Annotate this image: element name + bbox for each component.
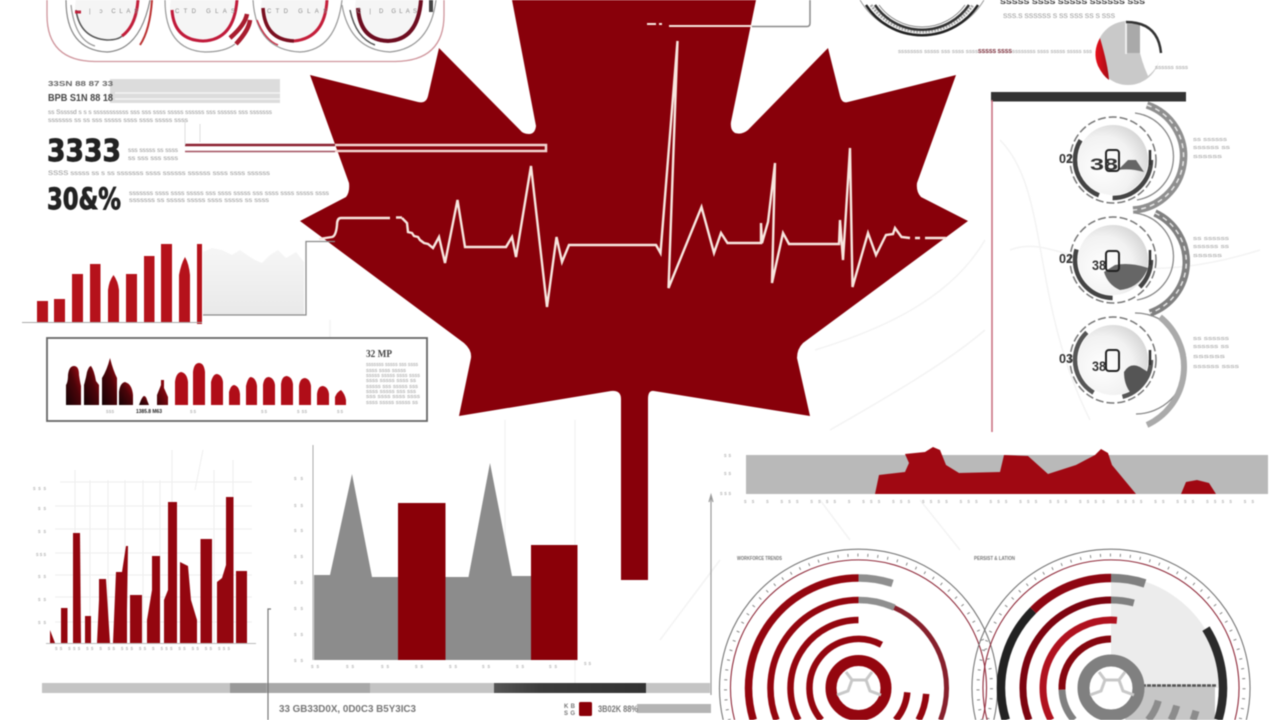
gauge 3: ssssss ss	[1193, 344, 1230, 350]
callout line top centre	[647, 0, 810, 26]
pill outline	[47, 0, 444, 62]
side note	[366, 348, 421, 406]
side note: sssssss sssss sss ssss	[366, 362, 418, 368]
axis labels: ss	[584, 661, 592, 667]
arcs	[749, 578, 947, 720]
lower grey wedge	[1125, 686, 1215, 720]
gauge 3	[1059, 313, 1240, 425]
caption line to pie: ssssssss sssss sss ssss ssss	[898, 49, 979, 55]
panel: boxed bar chart	[47, 338, 427, 421]
legend	[564, 702, 711, 717]
radial chart right	[972, 549, 1250, 720]
axis labels: ss	[549, 664, 558, 670]
big number: 3333: sss sssss ss ssss	[128, 148, 178, 154]
chart: grey peaks and red bars	[294, 445, 592, 670]
gauge 3: ssssss ssss	[1193, 364, 1240, 370]
bars	[50, 497, 247, 643]
caption line to pie: SSSSS SSSS	[978, 49, 1013, 55]
partial ring top right	[860, 0, 984, 35]
axis labels: ss	[294, 658, 304, 664]
y axis labels: ss	[38, 529, 46, 535]
gauge 2	[165, 0, 250, 52]
axis labels: ss	[294, 632, 304, 638]
y axis labels: ss	[38, 574, 46, 580]
axis labels: ss	[294, 476, 304, 482]
axis labels	[294, 476, 592, 670]
red bar 2	[531, 545, 578, 660]
gauge 2: ssssss	[1193, 253, 1223, 259]
gauge 1: 02	[1059, 151, 1073, 166]
text block: header band top left: ss Sssssd s s s sssssssssss sss sss ssss sssss ssssss sss ssssss sss sssssss	[48, 110, 272, 116]
bar chart top left	[22, 244, 202, 324]
x axis	[46, 642, 256, 644]
gauge labels: C | D GLAS	[357, 9, 417, 15]
arrow line to radial charts	[709, 495, 713, 695]
area strip with red region	[720, 447, 1268, 505]
gauge 3: ss ssssss	[1193, 336, 1230, 342]
bar labels	[106, 409, 344, 415]
x labels: ss sss ss s ss sss ss s sss ss ss ss sss	[55, 646, 230, 652]
gauge 2: ss ssssss	[1193, 236, 1230, 242]
big number: 30&%: 30&%	[47, 182, 121, 216]
bar labels: s s	[337, 409, 344, 415]
strip axis labels	[720, 453, 1254, 505]
faint background lines	[330, 140, 1260, 690]
bar labels: s ss	[297, 409, 308, 415]
gauge 1: 38	[1090, 155, 1118, 174]
text block: header band top left: 33SN 88 87 33	[48, 81, 113, 88]
gauge 2: 38	[1092, 257, 1106, 273]
caption line to pie	[898, 49, 1093, 55]
gauge 2: ssssss ss	[1193, 244, 1230, 250]
caption line to pie: ssssssss ssss sssss sssss sss	[1012, 49, 1093, 55]
text block top right	[1000, 0, 1145, 20]
gauge labels: CTD GLAS	[175, 9, 235, 15]
arcs	[1001, 578, 1223, 720]
legend: 3B02K 88%	[598, 704, 638, 714]
big number: 30&%: sssssss ssss ssss sssss sss ssss sssss sss ssss ssss sssss ssss	[129, 191, 329, 197]
gauge 2	[1059, 213, 1230, 313]
side note: sssss sssss ssss ssss	[366, 373, 421, 379]
gauge labels: - | ɔ CLAS	[78, 9, 138, 15]
side note: sss ssss ssss ssss	[366, 394, 421, 400]
y axis labels: ss	[38, 597, 46, 603]
panel: right column of gauges	[991, 92, 1240, 432]
outer tick ring	[972, 549, 1250, 720]
maple leaf	[300, 0, 968, 580]
axis labels: ss	[294, 606, 304, 612]
side note: sssss sss sssss sss	[366, 384, 419, 390]
axis	[312, 445, 314, 660]
gauge labels: CTD GLAS	[267, 9, 327, 15]
axis labels: ss	[294, 503, 304, 509]
bar labels: 1385.8 M63	[136, 409, 162, 415]
y axis labels: sss	[36, 552, 46, 558]
pie chart: ssssss ssss	[1155, 65, 1189, 71]
gauge 1: ssssss	[1193, 154, 1223, 160]
y axis labels	[33, 486, 46, 626]
axis labels: ss	[294, 554, 304, 560]
bottom caption: 33 GB33D0X, 0D0C3 B5Y3IC3	[279, 704, 416, 715]
gauge labels	[78, 9, 417, 15]
callout lines left to leaf	[185, 122, 546, 152]
grey area	[314, 463, 532, 660]
gauge 3: 03	[1059, 351, 1073, 366]
text block: header band top left: sssssss ss ss sss sssss ssss ssss sssss ssss	[48, 118, 188, 124]
strip axis labels: ss	[724, 471, 732, 477]
strip axis labels: ss s sss ssss s sss sss ssss sss sss sss sss ssss ssss ss sss ssss ss	[744, 499, 1254, 505]
strip axis labels: sss	[720, 491, 732, 497]
centre icon	[1090, 672, 1134, 695]
big number: 3333: 3333	[47, 134, 121, 169]
timeline bar	[42, 683, 710, 693]
outer tick ring	[720, 549, 998, 720]
pie chart	[1095, 21, 1189, 85]
side note: ssss ssss sssss	[366, 368, 407, 374]
bar labels: s s	[190, 409, 196, 415]
y axis labels: ss	[38, 506, 46, 512]
light wedge	[1111, 576, 1222, 688]
panel left rule	[991, 100, 993, 432]
strip axis labels: ss	[724, 453, 732, 459]
heartbeat line	[319, 41, 946, 307]
bar labels: sss	[106, 409, 114, 415]
gauge 1: ss ssssss	[1193, 137, 1228, 143]
radial chart left	[720, 549, 998, 720]
big number: 30&%: sssssss ss sssss sssss ssss sssss ss ssss	[129, 198, 269, 204]
side note: ssss sssss sss sss	[366, 389, 417, 395]
chart title: PERSIST & LATION	[974, 556, 1015, 562]
bar labels: s s	[261, 409, 268, 415]
panel header bar	[991, 92, 1186, 102]
axis labels: ss	[381, 664, 390, 670]
chart: spiky red bars	[33, 450, 256, 652]
side note: ssss sssss sssss ss	[366, 400, 419, 406]
text block: header band top left	[48, 79, 280, 124]
side note: ssss sssss ssss ss	[366, 378, 417, 384]
y axis labels: ss	[38, 620, 46, 626]
centre icon	[837, 672, 881, 695]
axis labels: ss	[346, 664, 354, 670]
side note: 32 MP	[366, 348, 392, 360]
dark and red bars	[66, 358, 346, 405]
big number: 3333	[47, 134, 270, 177]
legend: KB	[564, 704, 576, 710]
gauge 4	[342, 0, 436, 52]
axis labels: ss	[294, 580, 304, 586]
axis labels: ss	[449, 664, 458, 670]
chart title: WORKFORCE TRENDS	[737, 556, 782, 562]
gauge 3	[253, 0, 342, 52]
gridlines	[55, 450, 252, 643]
gauge 3: 38	[1092, 358, 1106, 374]
text block: header band top left: BPB S1N 88 18	[48, 93, 113, 104]
gauge 3: ssssss	[1193, 354, 1226, 360]
big number: 3333: ss sss sss ssss	[128, 156, 178, 162]
axis labels: ss	[415, 664, 424, 670]
gauge 1	[66, 0, 152, 52]
axis labels: ss	[294, 528, 304, 534]
connector line bottom	[268, 609, 271, 720]
legend: SG	[564, 711, 575, 717]
panel: four gauge rings top left	[47, 0, 444, 62]
red bar 1	[398, 503, 446, 660]
y axis labels: sss	[33, 486, 46, 492]
big number: 3333: SSSS sssss ss s ss sssssss ssss ssssss ssssss ssss ssss ssssss	[48, 171, 270, 177]
gauge 2: 02	[1059, 251, 1073, 266]
axis labels: ss	[482, 664, 490, 670]
axis labels: ss	[516, 664, 524, 670]
gauge 1	[1059, 105, 1231, 210]
area chart with connector	[203, 242, 335, 315]
gauge 1: ssssss ss	[1193, 145, 1231, 151]
text block top right: SSS.S SSSSSS S SS SSS SS S SSS	[1003, 14, 1115, 20]
axis labels: ss	[311, 664, 320, 670]
big number: 30&%	[47, 182, 329, 216]
